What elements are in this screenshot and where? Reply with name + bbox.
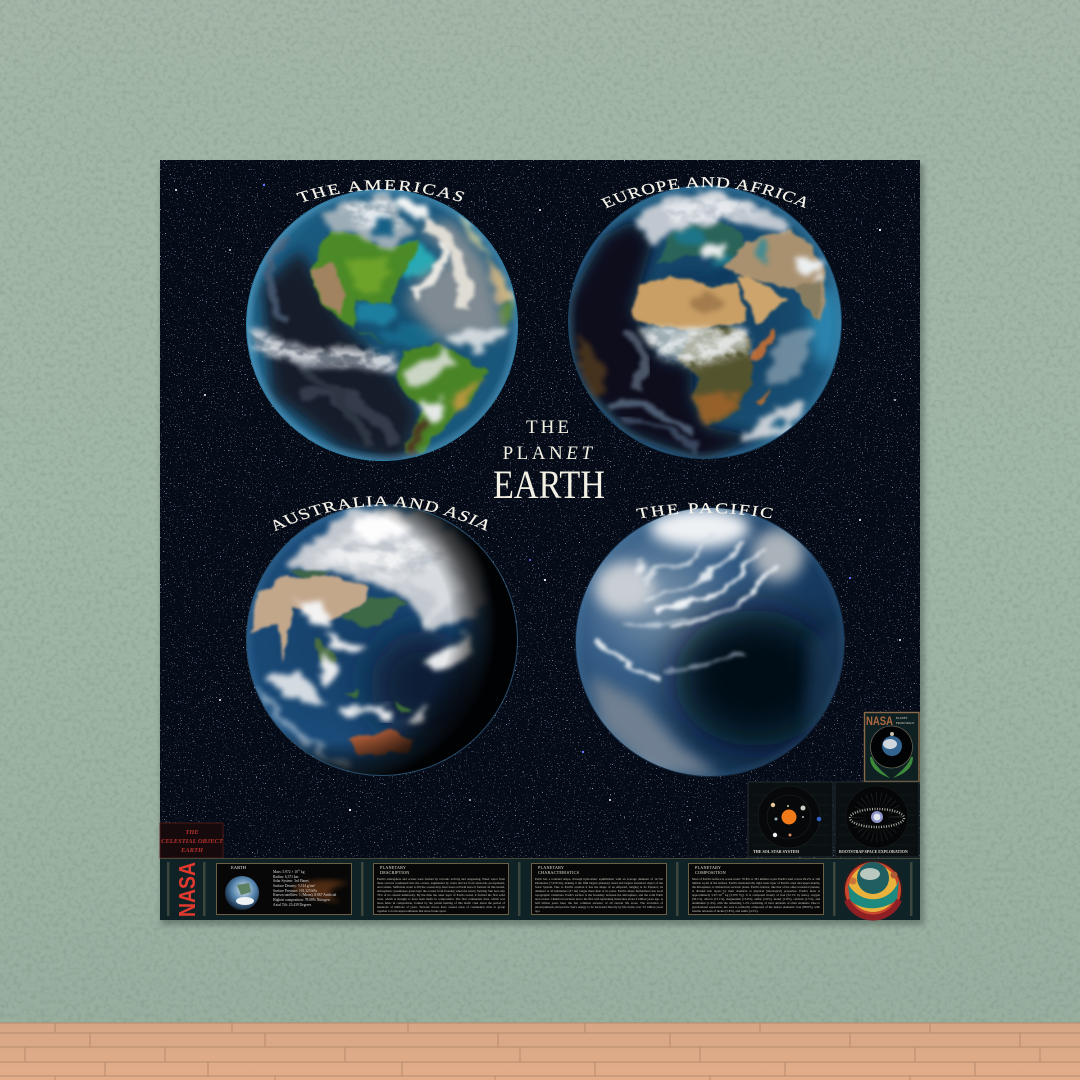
panel: planetary characteristics	[531, 863, 667, 915]
heading: composition: PLANETARY	[695, 865, 721, 870]
heading: description: DESCRIPTION	[380, 870, 409, 875]
lower left gray	[590, 675, 720, 775]
heading: characteristics: PLANETARY	[538, 865, 564, 870]
icon: Earth globe	[225, 876, 259, 910]
cloud over Canada and Greenland	[323, 193, 413, 250]
swirling white hurricane	[407, 220, 505, 340]
heading: composition: COMPOSITION	[695, 870, 726, 875]
heading: Earth: EARTH	[231, 865, 246, 870]
land: Asia	[723, 230, 827, 323]
dark swirling storm quadrant	[262, 250, 420, 465]
panel: planetary composition	[688, 863, 824, 915]
panel: planetary description	[373, 863, 509, 915]
text block: Earth statistics: Surface Pressure: 101,325 hPa	[273, 889, 317, 893]
heading: description: PLANETARY	[380, 865, 406, 870]
text block: Earth statistics: Known satellites: 1 (Moon), 8,067 Artificial	[273, 893, 336, 897]
panel: starfield poster background	[160, 160, 920, 920]
land: Asia desert	[250, 573, 370, 663]
badge: NASA mission patch	[864, 712, 919, 782]
globe: Australia and Asia	[246, 504, 518, 776]
poster shadow	[161, 164, 924, 925]
panel: bootstrap space exploration: BOOTSTRAP SPACE EXPLORATION	[839, 849, 908, 854]
gray cloud band	[250, 327, 397, 372]
panel: the solar system	[748, 782, 833, 857]
clouds	[640, 330, 745, 362]
panel: bottom information strip	[160, 858, 920, 920]
callout: celestial object red banner: THE	[185, 829, 199, 836]
logo: NASA worm: NASA	[174, 862, 200, 917]
land: Europe	[657, 220, 747, 263]
text block: description: Earth's atmosphere and oceans were formed by volcanic activity and outgassing. Water vapor from these sources condensed into the oceans, augmented by water and ice from asteroids, protoplanets, and comets. Sufficient water to fill the oceans may have been on Earth since it formed. In this model, atmospheric greenhouse gases kept the oceans from freezing when the newly forming Sun had only 70% of its current luminosity. By the time the outer layer of Earth cooled, it formed the first solid crust, which is thought to have been mafic in composition. The first continental crust, which was more felsic in composition, formed by the partial melting of this mafic crust about the period of hundreds of millions of years. Tectonic forces have caused areas of continental crust to group together to form supercontinents that since broke apart.	[377, 877, 505, 913]
dark lower right	[675, 610, 835, 746]
wooden floor	[0, 1023, 1080, 1080]
land: North America	[310, 230, 423, 343]
land: Africa south	[680, 328, 753, 427]
globe: the Americas	[246, 189, 518, 465]
globe: Europe and Africa	[565, 185, 842, 462]
land: Arabia	[737, 273, 787, 323]
title: The Planet Earth: THE	[526, 417, 572, 438]
text block: Earth statistics: Axial Tilt: 23.439 Degrees	[273, 903, 311, 907]
bright cloud cap	[650, 508, 750, 548]
land: green Asia	[340, 597, 407, 627]
panel: Earth facts	[216, 863, 352, 915]
heading: Australia and Asia: AUSTRALIA AND ASIA	[273, 496, 488, 532]
panel: bootstrap space exploration	[835, 782, 919, 857]
dark night ocean	[370, 630, 480, 740]
land: Australia	[350, 730, 417, 755]
land: Sahara	[632, 277, 747, 330]
heading: The Pacific: THE PACIFIC	[636, 503, 773, 518]
badge: NASA mission patch: NASA	[866, 714, 893, 728]
title: The Planet Earth: EARTH	[493, 462, 605, 507]
heading: The Americas: THE AMERICAS	[296, 180, 464, 202]
decorative solar flare	[291, 878, 348, 904]
text block: Earth statistics: Surface Density: 5.514 g/cm³	[273, 884, 315, 888]
heading: description	[380, 865, 410, 875]
text block: Earth statistics: Radius: 6,371 km	[273, 875, 298, 879]
Mediterranean	[662, 268, 735, 286]
shallow seas	[351, 300, 395, 326]
top cloud mass	[283, 510, 485, 630]
heading: Europe and Africa: EUROPE AND AFRICA	[600, 177, 806, 208]
title: The Planet Earth: PLANET	[503, 443, 595, 464]
text block: composition: Most of Earth's surface is ocean water: 70.8% or 361 million sq mi. Earth's land covers 29.2% or 149 million sq mi of the surface. Earth's mechanically rigid outer layer of Earth's crust and upper mantle, the lithosphere, is divided into tectonic plates. Earth's interior, like that of the other terrestrial planets, is divided into layers by their chemical or physical (rheological) properties. Earth's mass is approximately 5.97×1024 kg (5,970 Yg). It is composed mostly of iron (32.1% by mass), oxygen (30.1%), silicon (15.1%), magnesium (13.9%), sulfur (2.9%), nickel (1.8%), calcium (1.5%), and aluminium (1.4%), with the remaining 1.2% consisting of trace amounts of other elements. Due to gravitational separation, the core is primarily composed of the denser elements: iron (88.8%), with smaller amounts of nickel (5.8%), and sulfur (4.5%).	[692, 877, 820, 913]
badge: NASA mission patch: FROM SPACE	[896, 721, 914, 725]
text block: Earth statistics	[273, 870, 336, 907]
badge: NASA mission patch: PLANET	[896, 716, 908, 720]
text block: characteristics: Earth has a rounded shape, through hydrostatic equilibrium, with an average diameter of 12,742 kilometers (7,918 mi), making it the fifth largest planetary sized and largest terrestrial object of the Solar System. Due to Earth's rotation it has the shape of an ellipsoid, bulging at its Equator; its diameter is 43 kilometers (27 mi) longer there than at its poles. Earth's shape furthermore has local topographic variations. Earth's surface is the boundary between the atmosphere, and the solid Earth and oceans. Chemical reactions led to the first self-replicating molecules about 4 billion years ago. A half billion years later, the last common ancestor of all current life arose. The evolution of photosynthesis allowed the Sun's energy to be harvested directly by life forms over 3.5 billion years ago.	[535, 877, 663, 913]
callout: celestial object red banner: CELESTIAL OBJECT	[161, 838, 224, 845]
cloud systems	[295, 602, 333, 630]
callout: celestial object red banner	[160, 823, 224, 858]
white cloud banks	[447, 328, 510, 352]
dark western storm	[565, 220, 760, 462]
title: The Planet Earth	[493, 417, 605, 507]
globe: the Pacific	[575, 507, 848, 777]
right limb	[801, 631, 844, 727]
text block: Earth statistics: Mass: 5.972 × 1024 kg	[273, 870, 304, 874]
callout: celestial object red banner: EARTH	[180, 847, 204, 854]
heading: characteristics	[538, 865, 579, 875]
emblem: round Earth seal	[844, 860, 902, 920]
text block: Earth statistics: Solar System: 3rd Planet	[273, 879, 309, 883]
panel: the solar system: THE SOL STAR SYSTEM	[753, 849, 799, 854]
cloud streaks	[645, 540, 745, 600]
desert limb	[487, 257, 514, 307]
heading: composition	[695, 865, 726, 875]
text block: Earth statistics: Highest composition: 78.08% Nitrogen	[273, 898, 330, 902]
land: South America	[397, 343, 488, 453]
heading: characteristics: CHARACTERISTICS	[538, 870, 579, 875]
